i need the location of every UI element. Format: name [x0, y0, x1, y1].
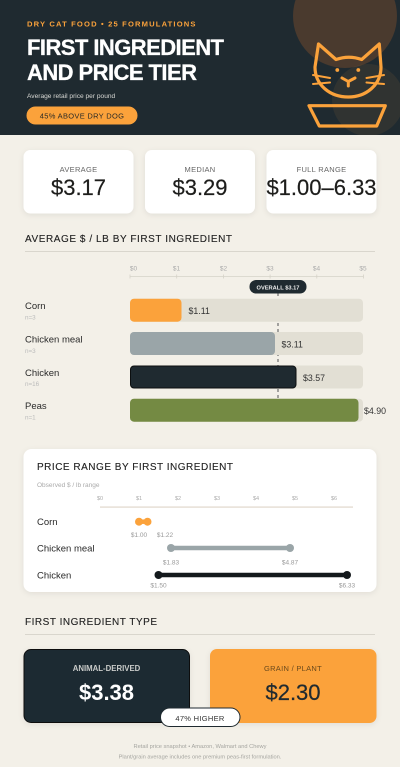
row: corn [25, 299, 363, 322]
stat card: average [24, 150, 134, 214]
range axis: $6 [331, 496, 337, 502]
header banner [0, 0, 400, 136]
range: chicken: $1.50 [150, 582, 167, 590]
stat card: median [145, 150, 255, 214]
overall reference line [277, 293, 279, 400]
stat card: full range [266, 150, 377, 214]
card: grain / plant [210, 649, 376, 723]
section heading: first ingredient type: FIRST INGREDIENT TYPE [25, 617, 157, 628]
bar chart axis: $2 [220, 266, 227, 272]
subtitle: Average retail price per pound [27, 93, 116, 100]
row: peas: Peas [25, 401, 47, 412]
row: chicken meal [25, 332, 363, 355]
stat card: average: $3.17 [51, 175, 106, 200]
title: AND PRICE TIER [27, 60, 197, 85]
range: chicken: Chicken [37, 570, 71, 582]
card: animal-derived [24, 650, 190, 722]
range axis: $3 [214, 496, 220, 502]
overall pill: OVERALL $3.17 [257, 286, 299, 292]
bar chart axis: $1 [173, 266, 180, 272]
range: chicken: $6.33 [339, 582, 356, 590]
range: chicken [37, 570, 356, 590]
stat card: full range: $1.00–6.33 [266, 175, 377, 200]
footer notes [119, 744, 282, 760]
badge: 45% above dry dog [26, 106, 138, 124]
range axis: $2 [175, 496, 181, 502]
card: grain / plant: $2.30 [265, 680, 321, 705]
range axis: $4 [253, 496, 259, 502]
bar chart axis [130, 266, 367, 278]
overall pill [250, 280, 306, 294]
row: corn: Corn [25, 301, 46, 312]
stat card: median: $3.29 [172, 175, 228, 200]
section heading: average by first ingredient: AVERAGE $ / LB BY FIRST INGREDIENT [25, 234, 232, 245]
range: chicken meal: Chicken meal [37, 544, 95, 554]
footer notes: Retail price snapshot • Amazon, Walmart and Chewy [134, 744, 267, 750]
row: peas: n=1 [25, 414, 36, 422]
bar chart axis: $0 [130, 266, 137, 272]
row: chicken: $3.57 [303, 373, 325, 383]
card: animal-derived: $3.38 [79, 680, 134, 705]
row: corn: n=3 [25, 314, 36, 322]
footer notes: Plant/grain average includes one premium peas-first formulation. [119, 754, 282, 760]
row: peas: $4.90 [364, 406, 386, 416]
bar chart axis: $3 [266, 266, 274, 272]
title: FIRST INGREDIENT [27, 35, 225, 60]
icon: cat and bowl [309, 44, 385, 126]
card: animal-derived: ANIMAL-DERIVED [73, 664, 141, 673]
bar chart axis: $4 [313, 266, 320, 272]
panel: price range [24, 449, 376, 592]
row: chicken meal: Chicken meal [25, 334, 83, 346]
range: chicken meal: $4.87 [282, 560, 299, 566]
badge: 45% above dry dog: 45% ABOVE DRY DOG [40, 112, 124, 120]
row: chicken meal: n=3 [25, 348, 36, 355]
range: corn: $1.22 [157, 532, 174, 539]
row: chicken: n=16 [25, 381, 40, 388]
row: chicken: Chicken [25, 368, 59, 379]
range axis [97, 496, 353, 508]
range: chicken meal [37, 544, 299, 566]
range: corn [37, 517, 174, 539]
row: chicken meal: $3.11 [282, 340, 303, 350]
badge: 47% higher [160, 708, 240, 726]
range: corn: Corn [37, 517, 58, 528]
card: grain / plant: GRAIN / PLANT [264, 664, 322, 673]
title [27, 35, 225, 85]
bar chart axis: $5 [359, 266, 367, 272]
row: chicken [25, 366, 363, 388]
stat card: average: AVERAGE [60, 165, 97, 174]
range axis: $5 [292, 496, 298, 502]
panel subtitle: Observed $ / lb range [37, 482, 100, 489]
range axis: $1 [136, 496, 142, 502]
row: corn: $1.11 [188, 306, 210, 316]
panel heading: PRICE RANGE BY FIRST INGREDIENT [37, 462, 233, 473]
bar chart: average price [25, 266, 386, 422]
eyebrow: DRY CAT FOOD • 25 FORMULATIONS [27, 20, 196, 28]
range axis: $0 [97, 496, 103, 502]
stat card: median: MEDIAN [185, 165, 215, 174]
range: chicken meal: $1.83 [163, 560, 180, 566]
stat card: full range: FULL RANGE [297, 165, 346, 174]
row: peas [25, 399, 386, 422]
range: corn: $1.00 [131, 532, 148, 539]
badge: 47% higher: 47% HIGHER [175, 714, 225, 723]
